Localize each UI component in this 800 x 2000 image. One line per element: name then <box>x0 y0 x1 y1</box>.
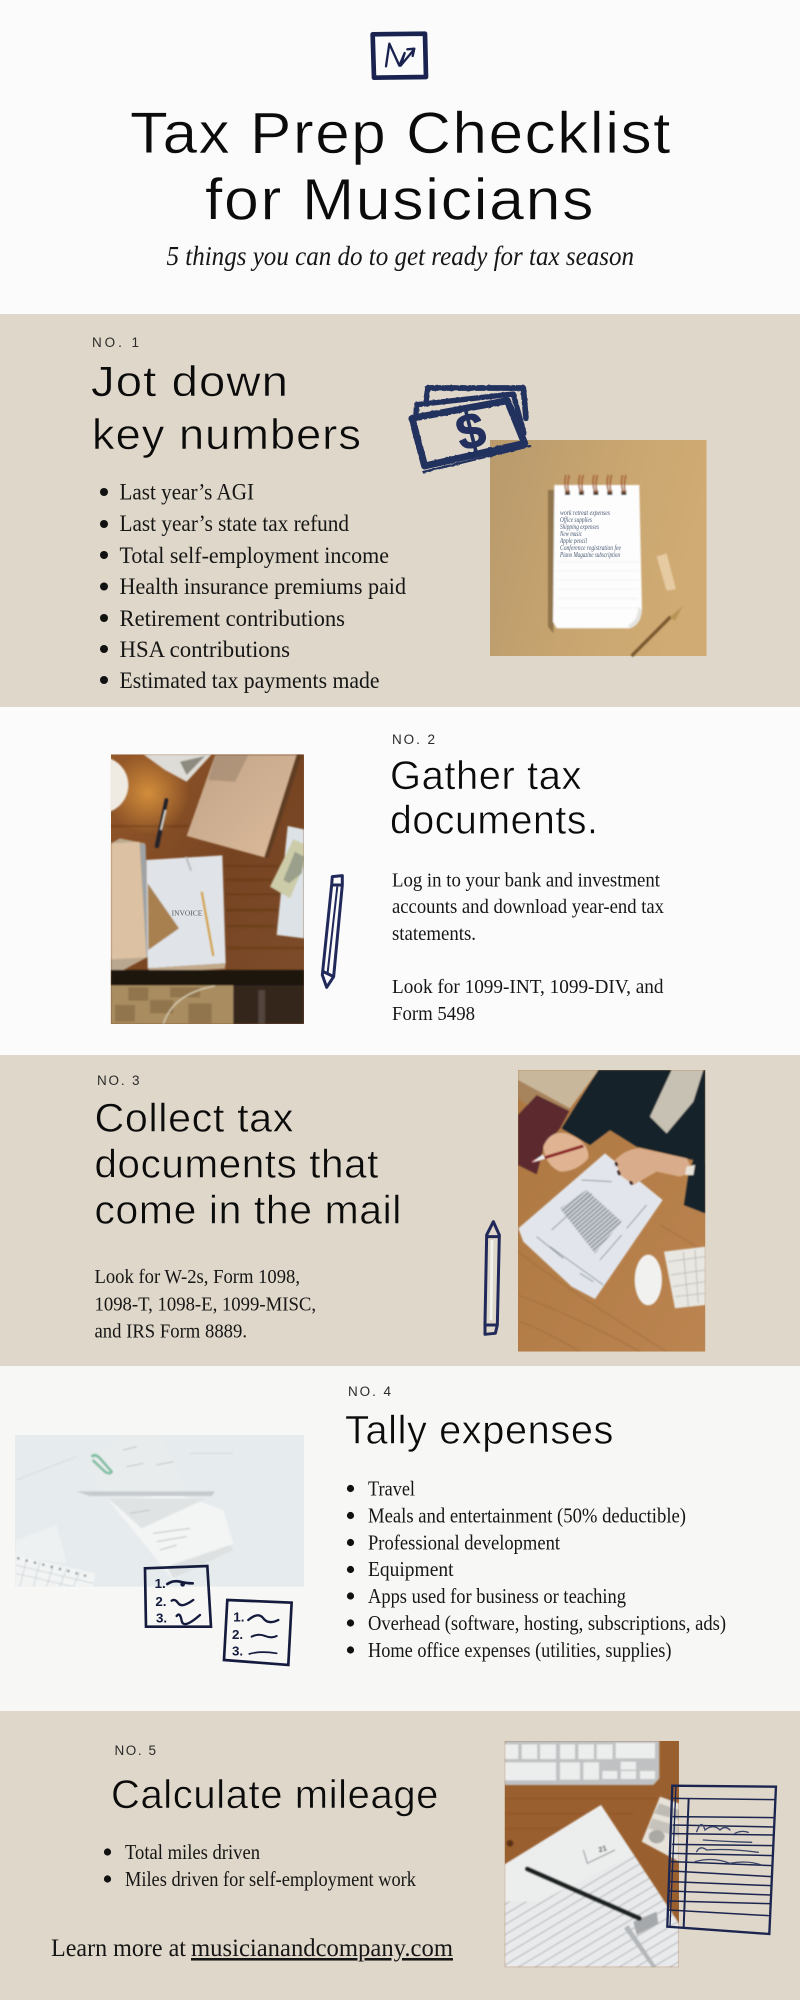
photo: desk with invoice <box>110 754 304 1024</box>
title: for Musicians <box>205 168 595 232</box>
heading: key numbers <box>92 411 362 459</box>
panel: No. 3 Collect tax documents <box>0 1055 800 1366</box>
photo: tax form and keyboard: 21 <box>598 1843 608 1854</box>
body text: accounts and download year-end tax <box>392 896 664 918</box>
photo: notepad on tan background: Office supplies <box>560 516 592 524</box>
step number: NO. 4 <box>348 1384 391 1399</box>
heading: come in the mail <box>94 1188 402 1232</box>
bullet list: Health insurance premiums paid <box>120 574 406 599</box>
photo: tax form and keyboard <box>505 1741 679 1967</box>
bullet list <box>347 1476 726 1662</box>
photo: notepad on tan background: New music <box>559 530 583 538</box>
bullet list: Total miles driven <box>125 1840 260 1864</box>
heading <box>91 358 362 459</box>
photo: hands filling in tax form <box>518 1070 705 1352</box>
icon: ledger sheet <box>667 1786 776 1934</box>
call to action <box>51 1933 453 1962</box>
body text: Look for W-2s, Form 1098, <box>94 1266 300 1288</box>
panel: No. 1 Jot down key numbers <box>0 314 800 707</box>
photo: receipts on marble <box>15 1435 304 1587</box>
photo: notepad on tan background <box>490 440 706 656</box>
bullet list: Home office expenses (utilities, supplies) <box>368 1638 672 1662</box>
body text: and IRS Form 8889. <box>94 1320 247 1342</box>
body text: Look for 1099-INT, 1099-DIV, and <box>392 976 664 998</box>
heading: Gather tax <box>390 754 582 798</box>
photo: notepad on tan background: Piano Magazine subscription <box>559 551 620 559</box>
title <box>130 101 672 232</box>
bullet list: Estimated tax payments made <box>120 668 380 693</box>
heading <box>390 754 598 842</box>
bullet list: Apps used for business or teaching <box>368 1584 626 1608</box>
icon: money bills <box>412 388 530 472</box>
bullet list: Last year’s state tax refund <box>120 511 349 536</box>
step number: NO. 5 <box>114 1743 156 1758</box>
icon: numbered list right: 1. <box>233 1609 244 1624</box>
photo: notepad on tan background: Shipping expenses <box>560 523 599 531</box>
panel: No. 2 Gather tax documents <box>0 707 800 1055</box>
step number: NO. 3 <box>97 1073 140 1088</box>
bullet list: Last year’s AGI <box>120 480 254 504</box>
step number: NO. 1 <box>92 335 139 350</box>
heading: documents that <box>94 1142 379 1186</box>
title: Tax Prep Checklist <box>130 101 672 166</box>
body text: Form 5498 <box>392 1003 475 1025</box>
heading: documents. <box>390 798 598 842</box>
step number: NO. 2 <box>392 732 435 747</box>
bullet list: HSA contributions <box>120 637 290 662</box>
bullet list: Travel <box>368 1476 415 1500</box>
icon: numbered list right: 3. <box>232 1643 243 1658</box>
call to action: Learn more at <box>51 1933 186 1962</box>
icon: pencil <box>322 876 342 987</box>
panel: header <box>130 34 672 271</box>
icon: logo <box>373 34 426 78</box>
subtitle: 5 things you can do to get ready for tax season <box>166 241 634 271</box>
photo: notepad on tan background: Apple pencil <box>559 537 587 545</box>
heading: Calculate mileage <box>111 1773 439 1817</box>
icon: numbered list right: 2. <box>232 1627 243 1642</box>
panel: No. 4 Tally expenses <box>15 1386 726 1666</box>
bullet list: Overhead (software, hosting, subscriptions, ads) <box>368 1611 726 1635</box>
photo: desk with invoice: INVOICE <box>172 910 202 918</box>
heading: Tally expenses <box>345 1408 614 1452</box>
icon: pencil <box>485 1222 499 1334</box>
icon: numbered list left: 1. <box>155 1576 166 1591</box>
bullet list <box>104 1840 416 1891</box>
body text: Log in to your bank and investment <box>392 870 660 892</box>
body text: statements. <box>392 923 476 945</box>
heading: Collect tax <box>94 1096 294 1140</box>
body text <box>94 1266 316 1342</box>
icon: money bills: $ <box>450 401 491 462</box>
bullet list: Equipment <box>368 1557 454 1581</box>
bullet list: Total self-employment income <box>120 543 389 568</box>
photo: notepad on tan background: work retreat expenses <box>560 509 610 517</box>
panel: No. 5 Calculate mileage <box>0 1711 800 2000</box>
body text <box>392 870 664 1025</box>
icon: numbered list right <box>224 1600 292 1665</box>
call to action: musicianandcompany.com <box>191 1933 453 1962</box>
bullet list <box>100 480 406 693</box>
bullet list: Meals and entertainment (50% deductible) <box>368 1504 686 1528</box>
heading <box>94 1096 402 1232</box>
heading: Jot down <box>91 358 289 406</box>
icon: numbered list left: 2. <box>155 1594 166 1609</box>
bullet list: Retirement contributions <box>120 606 345 631</box>
photo: notepad on tan background: Conference registration fee <box>560 544 621 552</box>
icon: numbered list left <box>145 1566 211 1627</box>
icon: numbered list left: 3. <box>156 1611 167 1626</box>
bullet list: Professional development <box>368 1530 560 1554</box>
body text: 1098-T, 1098-E, 1099-MISC, <box>94 1294 316 1316</box>
bullet list: Miles driven for self-employment work <box>125 1867 416 1891</box>
